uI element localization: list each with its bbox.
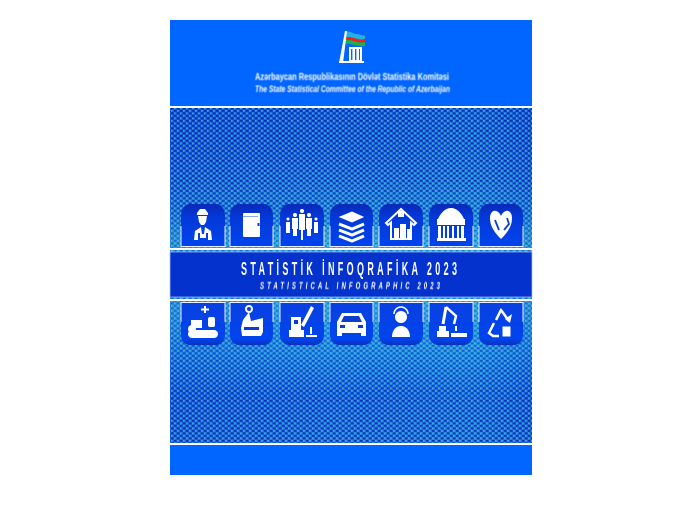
header panel bbox=[170, 20, 532, 106]
icon card: labour worker bbox=[181, 204, 225, 247]
patterned background panel bbox=[170, 108, 532, 443]
icon card: call-centre person bbox=[379, 302, 423, 345]
banner title: Azerbaijani: STATİSTİK İNFOQRAFİKA 2023 bbox=[241, 259, 457, 280]
top icon row bbox=[181, 204, 523, 247]
icon card: health heart bbox=[479, 204, 523, 247]
icon card: people group bbox=[280, 204, 324, 247]
header title: Azerbaijani: Azərbaycan Respublikasının Dövlət Statistika Komitəsi bbox=[255, 72, 449, 83]
icon card: door / book bbox=[230, 204, 273, 247]
icon card: agriculture tractor bbox=[181, 302, 225, 345]
icon card: government building bbox=[429, 204, 473, 247]
logo: flag and monument bbox=[339, 31, 365, 63]
icon card: stacked books bbox=[330, 204, 373, 247]
banner title: English: STATISTICAL INFOGRAPHIC 2023 bbox=[260, 281, 440, 291]
bottom icon row bbox=[181, 302, 523, 345]
footer panel bbox=[170, 445, 532, 475]
white rule below banner bbox=[170, 299, 532, 301]
infographic cover bbox=[170, 20, 532, 475]
icon card: science microscope bbox=[280, 302, 324, 345]
icon card: car bbox=[330, 302, 373, 345]
icon card: recycling bbox=[479, 302, 523, 345]
icon card: industrial robot arm bbox=[429, 302, 473, 345]
header title: English: The State Statistical Committee of the Republic of Azerbaijan bbox=[255, 84, 450, 94]
white rule above banner bbox=[170, 248, 532, 250]
icon card: map and location pin bbox=[230, 302, 273, 345]
icon card: house and family bbox=[379, 204, 423, 247]
banner bbox=[170, 252, 532, 297]
white rule above footer bbox=[170, 443, 532, 445]
